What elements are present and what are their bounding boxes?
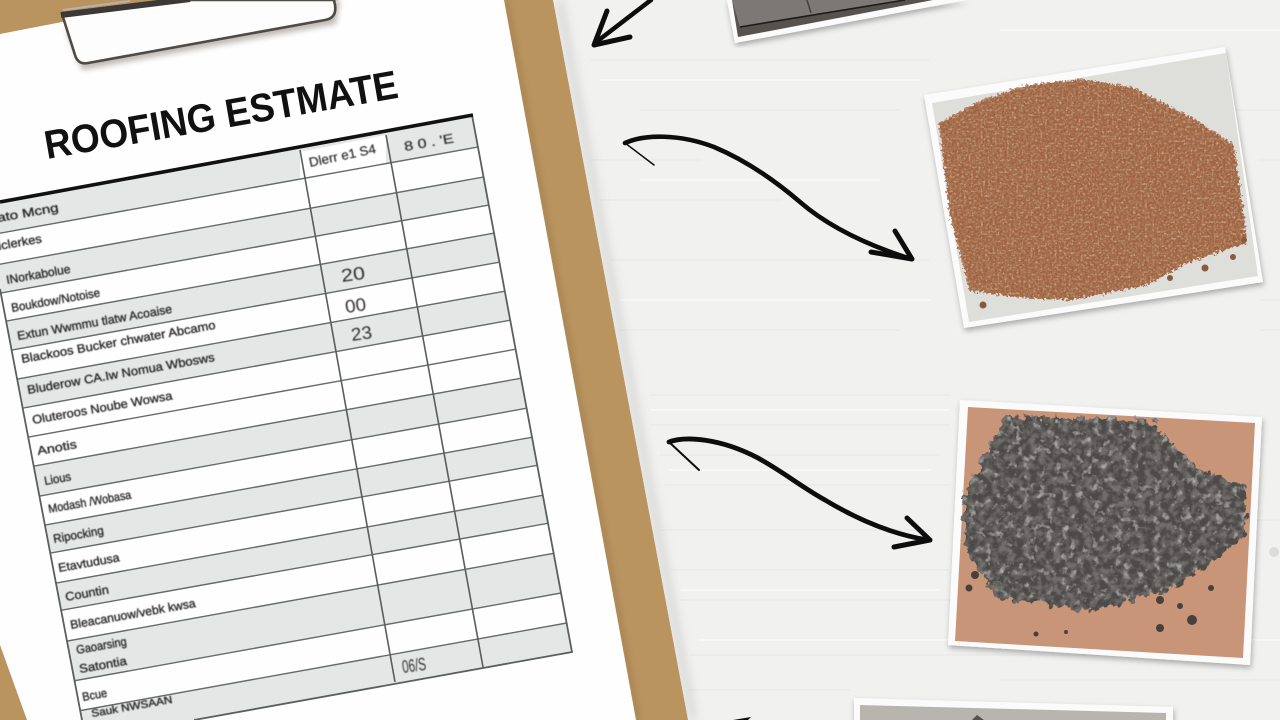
photo: shingles (top) [727,0,967,43]
table row labels: Bleacanuow/vebk kwsa [69,596,197,632]
shaded rows [0,92,600,720]
arrow: to bottom photo [733,717,751,720]
stray granules [966,571,1214,636]
brown granule pile [939,79,1246,300]
table row labels: Countin [64,583,110,604]
table row labels: Sauk NWSAAN [90,694,173,720]
table values: 20 [340,263,366,286]
photo: brown granules [924,47,1263,328]
table values: 00 [344,294,367,317]
table values: 06/S [401,654,427,677]
metal clip [61,0,340,70]
table row labels: Lious [43,469,72,488]
table values [340,263,427,677]
icon: small grey mark on the wood [1269,547,1279,557]
table row labels: Modash /Wobasa [47,488,133,516]
table values: 23 [350,322,373,345]
estimate table [0,92,600,720]
table row labels: Anotis [36,437,78,458]
table header labels: Dlerr e1 S4 [308,141,377,170]
table header labels: 8 0 . 'E [403,130,455,154]
table top rule [0,115,473,202]
title: ROOFING ESTMATE [41,63,401,168]
paper sheet [0,0,636,720]
arrow: to brown granules photo [625,137,912,259]
table row labels: Satontia [78,654,128,676]
paper shadow [504,0,640,720]
table row labels: Gaoarsing [75,634,128,657]
clipboard board [0,0,688,720]
arrow: to top photo [594,0,651,45]
table header labels [308,130,455,170]
table row labels: Oluteroos Noube Wowsa [31,388,174,427]
table row labels: Boukdow/Notoise [10,285,101,315]
arrow: to dark granules photo [669,439,930,547]
table row labels: INorkabolue [5,262,72,287]
column lines [300,135,483,682]
photo: bottom, cropped [854,698,1173,720]
table row labels: Bcue [81,686,108,704]
photo: dark granules on salmon background [948,400,1262,665]
table row labels: Extun Wwmmu tlatw Acoaise [16,302,173,343]
table row labels: Etavtudusa [57,550,121,575]
table border [0,115,572,720]
table row labels: Blackoos Bucker chwater Abcamo [20,318,217,366]
dark granule pile [963,416,1246,611]
row lines [0,146,566,712]
table row labels: Bluderow CA.Iw Nomua Wbosws [26,350,216,397]
board shadow [556,0,696,720]
table row labels [0,200,217,720]
table row labels: Ripocking [52,523,105,546]
stray granules [980,237,1247,308]
clipboard [0,0,696,720]
